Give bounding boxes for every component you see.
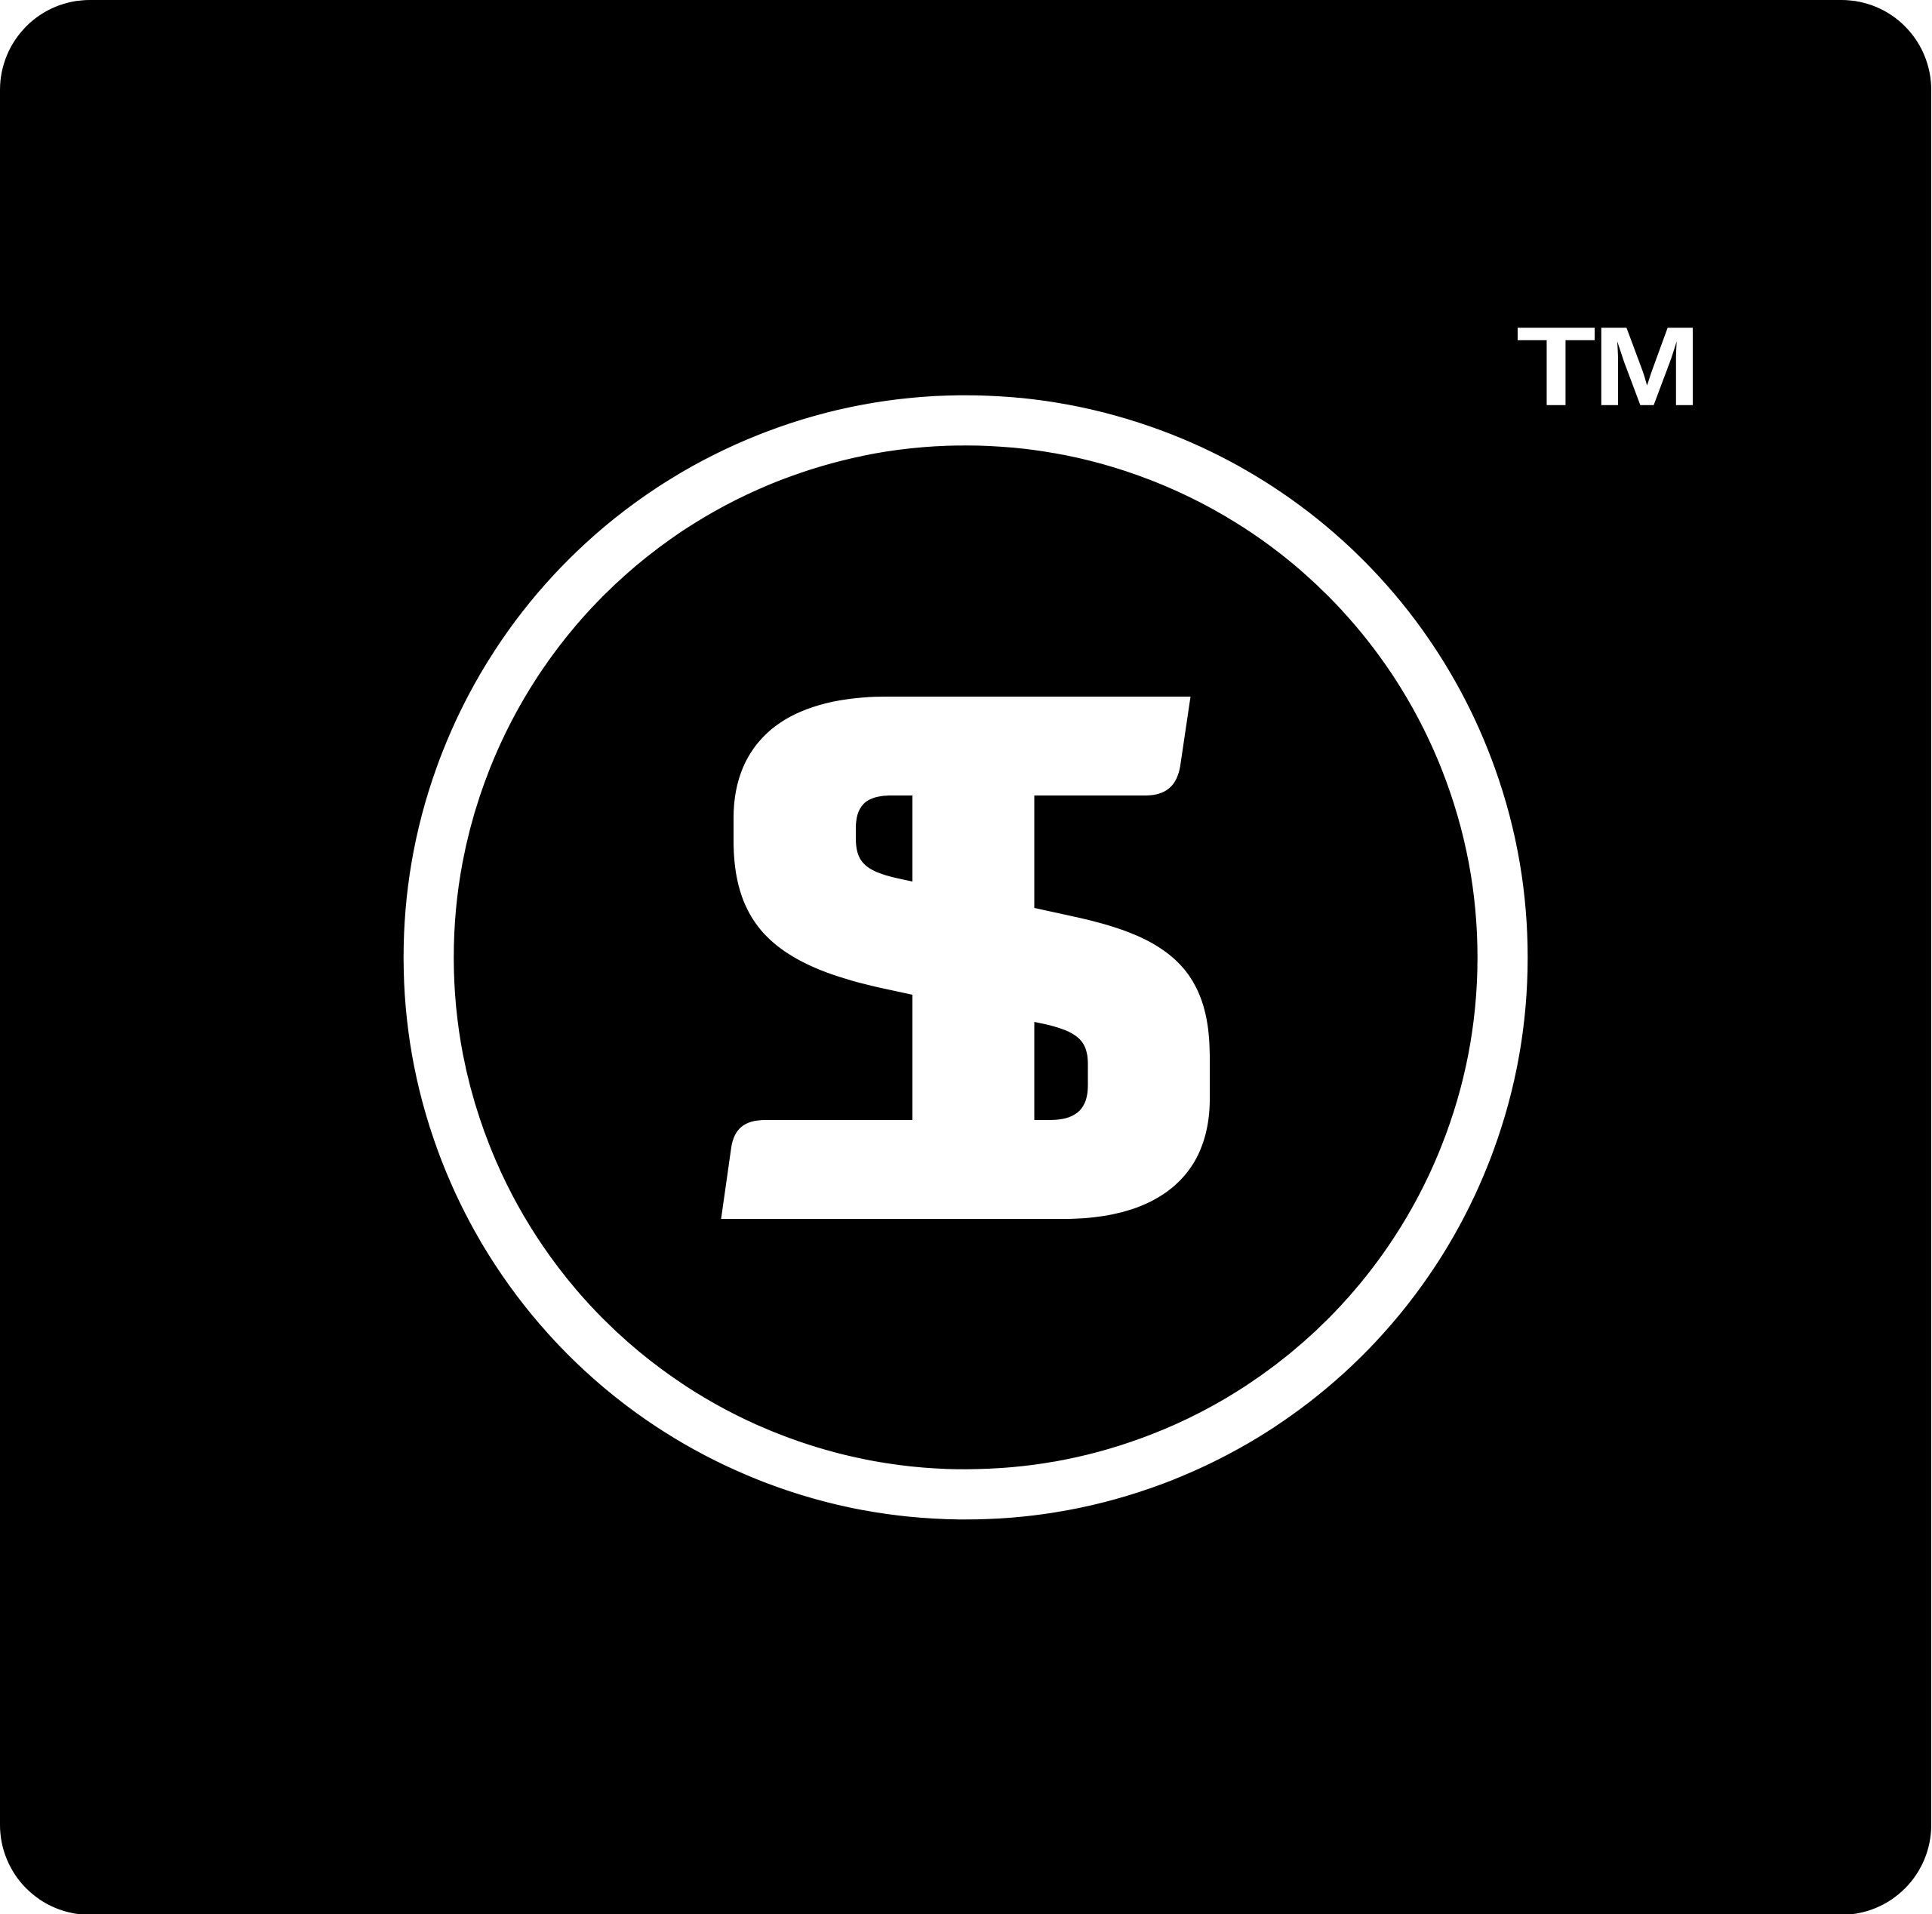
trademark text: TM [1516, 304, 1698, 429]
icon: stylised S monogram with vertical stem [721, 697, 1210, 1219]
circle ring [429, 420, 1503, 1494]
